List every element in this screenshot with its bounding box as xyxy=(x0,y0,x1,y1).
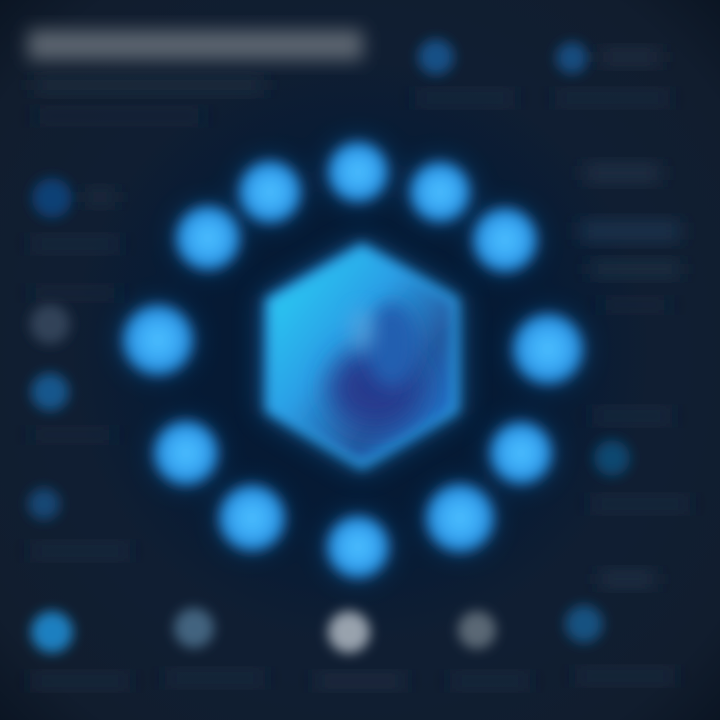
right column items xyxy=(565,165,690,682)
central dark halo xyxy=(70,60,650,640)
left column items xyxy=(28,178,130,557)
nodes xyxy=(123,142,583,578)
node glow xyxy=(122,140,584,579)
central hexagon xyxy=(262,240,462,472)
bottom row items xyxy=(30,608,530,687)
hexagon inner symbol xyxy=(329,348,421,428)
top right legend items xyxy=(415,39,670,104)
ring of blue nodes xyxy=(122,140,584,579)
title block xyxy=(28,30,363,122)
